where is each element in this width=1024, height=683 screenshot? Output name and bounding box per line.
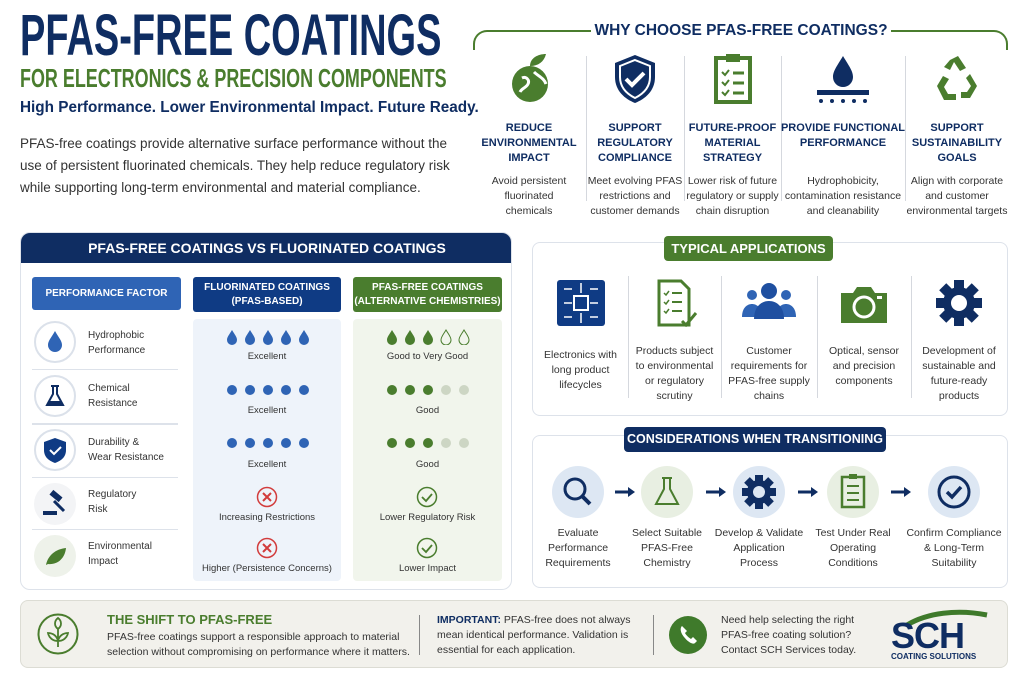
heading: typical applications: TYPICAL APPLICATIONS: [671, 241, 826, 256]
item: customer requirements: Customer: [746, 345, 792, 357]
panel: typical applications: [532, 242, 1008, 416]
item: regulatory compliance: customer demands: [590, 205, 680, 217]
step: select: [632, 466, 702, 569]
step: confirm: & Long-Term: [924, 542, 984, 554]
text: shift to pfas-free: THE SHIFT TO PFAS-FREE: [107, 612, 272, 627]
item: future-proof: chain disruption: [696, 205, 769, 217]
arrow: [615, 487, 635, 497]
arrow: [798, 487, 818, 497]
item: reduce environmental impact: REDUCE: [506, 122, 552, 134]
text: important: IMPORTANT: PFAS-free does not always mean identical performance. Validation is essential for each application.: [437, 614, 631, 656]
item: electronics: [544, 280, 617, 391]
item: reduce environmental impact: fluorinated: [504, 190, 554, 202]
item: regulatory compliance: COMPLIANCE: [598, 152, 672, 164]
item: sustainability goals: and customer: [925, 190, 989, 202]
logo: SCH: COATING SOLUTIONS: [891, 652, 976, 661]
step: test: [815, 466, 891, 569]
logo: SCH: SCH: [891, 615, 964, 656]
pfas-free ratings: Good to Very Good: [387, 351, 468, 362]
item: sustainability goals: [906, 56, 1008, 217]
item: sustainability goals: SUSTAINABILITY: [912, 137, 1002, 149]
item: sustainable development: sustainable and: [922, 360, 996, 372]
icon: sprout: [38, 614, 78, 654]
item: reduce environmental impact: Avoid persistent: [492, 175, 566, 187]
item: sustainable development: Development of: [922, 345, 996, 357]
item: customer requirements: [728, 283, 810, 402]
arrow: [706, 487, 726, 497]
column header: pfas-free: (ALTERNATIVE CHEMISTRIES): [354, 296, 501, 307]
icon: drop on surface: [817, 56, 869, 103]
step: develop: Application: [733, 542, 785, 554]
subtitle: FOR ELECTRONICS & PRECISION COMPONENTS: [20, 63, 447, 93]
item: future-proof: regulatory or supply: [686, 190, 779, 202]
item: functional performance: and cleanability: [807, 205, 879, 217]
column header: pfas-free: [353, 277, 502, 312]
fluorinated ratings: Higher (Persistence Concerns): [202, 563, 332, 574]
column header: fluorinated: FLUORINATED COATINGS: [204, 282, 330, 293]
title: PFAS-FREE COATINGS: [20, 3, 441, 68]
icon: globe leaf: [512, 54, 548, 102]
item: sustainable development: [922, 280, 996, 402]
item: sustainability goals: GOALS: [937, 152, 977, 164]
step: select: Chemistry: [643, 557, 691, 569]
item: functional performance: PERFORMANCE: [800, 137, 886, 149]
item: electronics: lifecycles: [559, 379, 602, 391]
step: develop: [715, 466, 803, 569]
item: electronics: Electronics with: [544, 349, 617, 361]
item: regulatory compliance: SUPPORT: [608, 122, 662, 134]
intro paragraph: PFAS-free coatings provide alternative surface performance without the use of persistent fluorinated chemicals. They help reduce regulatory risk while supporting long-term environmental and material compliance.: [20, 136, 450, 195]
fluorinated ratings: Excellent: [248, 351, 286, 362]
heading: considerations: [624, 427, 886, 452]
icon: camera: [841, 287, 887, 323]
arrow: [891, 487, 911, 497]
item: optical: components: [835, 375, 893, 387]
text: shift to pfas-free: PFAS-free coatings support a responsible approach to material selection without compromising on performance where it matters.: [107, 631, 410, 658]
heading: typical applications: [664, 236, 833, 261]
step: evaluate: Requirements: [545, 557, 611, 569]
column header: performance factor: PERFORMANCE FACTOR: [45, 288, 168, 299]
factor rows: Chemical: [88, 383, 130, 394]
step: develop: Develop & Validate: [715, 527, 803, 539]
factor rows: Environmental: [88, 541, 152, 552]
item: regulatory compliance: Meet evolving PFAS: [588, 175, 682, 187]
text: contact: Need help selecting the right PFAS-free coating solution? Contact SCH Services today.: [721, 614, 856, 656]
step: select: Select Suitable: [632, 527, 702, 539]
item: future-proof: [686, 54, 779, 217]
item: products subject: [636, 280, 714, 402]
column header: pfas-free: PFAS-FREE COATINGS: [372, 282, 483, 293]
fluorinated ratings: Excellent: [248, 405, 286, 416]
item: regulatory compliance: restrictions and: [599, 190, 671, 202]
step: evaluate: [545, 466, 611, 569]
step: select: PFAS-Free: [641, 542, 693, 554]
step: develop: Process: [740, 557, 778, 569]
item: regulatory compliance: REGULATORY: [597, 137, 673, 149]
item: sustainable development: future-ready: [931, 375, 987, 387]
panel: considerations: [532, 435, 1008, 588]
item: reduce environmental impact: [481, 54, 577, 217]
factor rows: Performance: [88, 345, 145, 356]
fluorinated ratings: [202, 330, 332, 574]
heading: why choose: WHY CHOOSE PFAS-FREE COATINGS?: [594, 22, 888, 39]
item: future-proof: MATERIAL: [704, 137, 760, 149]
icon: document check: [658, 280, 698, 327]
item: customer requirements: requirements for: [731, 360, 807, 372]
item: products subject: or regulatory: [645, 375, 704, 387]
factor rows: Impact: [88, 556, 118, 567]
fluorinated ratings: Excellent: [248, 459, 286, 470]
item: optical: Optical, sensor: [829, 345, 899, 357]
item: functional performance: contamination resistance: [785, 190, 901, 202]
step: evaluate: Evaluate: [558, 527, 598, 539]
item: future-proof: STRATEGY: [703, 152, 762, 164]
icon: recycle: [937, 56, 977, 100]
tagline: High Performance. Lower Environmental Impact. Future Ready.: [20, 99, 479, 116]
step: confirm: Suitability: [932, 557, 976, 569]
icon: people: [742, 283, 796, 319]
step: test: Test Under Real: [815, 527, 891, 539]
icon: phone: [669, 616, 707, 654]
icon: shield: [615, 55, 655, 103]
item: functional performance: Hydrophobicity,: [807, 175, 879, 187]
item: regulatory compliance: [588, 55, 682, 217]
heading: comparison: [21, 233, 513, 263]
icon: clipboard: [714, 54, 752, 104]
pfas-free ratings: [380, 329, 476, 574]
item: future-proof: FUTURE-PROOF: [689, 122, 776, 134]
heading: considerations: CONSIDERATIONS WHEN TRANSITIONING: [627, 432, 883, 446]
item: optical: [829, 287, 899, 387]
item: reduce environmental impact: IMPACT: [508, 152, 550, 164]
column header: fluorinated: (PFAS-BASED): [231, 296, 303, 307]
factor rows: [32, 321, 178, 577]
item: sustainability goals: environmental targets: [906, 205, 1007, 217]
step: test: Operating: [830, 542, 876, 554]
item: customer requirements: PFAS-free supply: [728, 375, 810, 387]
column header: fluorinated: [193, 277, 341, 312]
step: confirm: Confirm Compliance: [906, 527, 1002, 539]
step: evaluate: Performance: [548, 542, 608, 554]
heading: comparison: PFAS-FREE COATINGS VS FLUORINATED COATINGS: [88, 240, 446, 256]
factor rows: Risk: [88, 504, 107, 515]
item: sustainable development: products: [939, 390, 979, 402]
item: sustainability goals: SUPPORT: [930, 122, 984, 134]
icon: chip: [557, 280, 605, 326]
pfas-free ratings: Good: [416, 459, 439, 470]
pfas-free ratings: Good: [416, 405, 439, 416]
step: confirm: [906, 466, 1002, 569]
factor rows: Resistance: [88, 398, 137, 409]
logo: SCH: [891, 610, 988, 661]
item: products subject: Products subject: [636, 345, 713, 357]
item: future-proof: Lower risk of future: [688, 175, 777, 187]
panel: why choose: [473, 22, 1008, 217]
item: sustainability goals: Align with corporate: [911, 175, 1003, 187]
item: products subject: scrutiny: [656, 390, 693, 402]
item: reduce environmental impact: ENVIRONMENTAL: [481, 137, 577, 149]
icon: gear: [936, 280, 982, 326]
item: reduce environmental impact: chemicals: [506, 205, 552, 217]
step: test: Conditions: [828, 557, 878, 569]
item: electronics: long product: [552, 364, 609, 376]
factor rows: Durability &: [88, 437, 139, 448]
pfas-free ratings: Lower Regulatory Risk: [380, 512, 475, 523]
fluorinated ratings: Increasing Restrictions: [219, 512, 315, 523]
factor rows: Regulatory: [88, 489, 136, 500]
item: products subject: to environmental: [636, 360, 713, 372]
item: functional performance: [781, 56, 905, 217]
text: shift to pfas-free: [107, 612, 410, 658]
footer: [20, 600, 1008, 668]
item: functional performance: PROVIDE FUNCTIONAL: [781, 122, 905, 134]
panel: comparison: [20, 232, 512, 590]
item: optical: and precision: [833, 360, 895, 372]
column header: performance factor: [32, 277, 181, 310]
factor rows: Wear Resistance: [88, 452, 164, 463]
factor rows: Hydrophobic: [88, 330, 144, 341]
pfas-free ratings: Lower Impact: [399, 563, 456, 574]
item: customer requirements: chains: [754, 390, 784, 402]
